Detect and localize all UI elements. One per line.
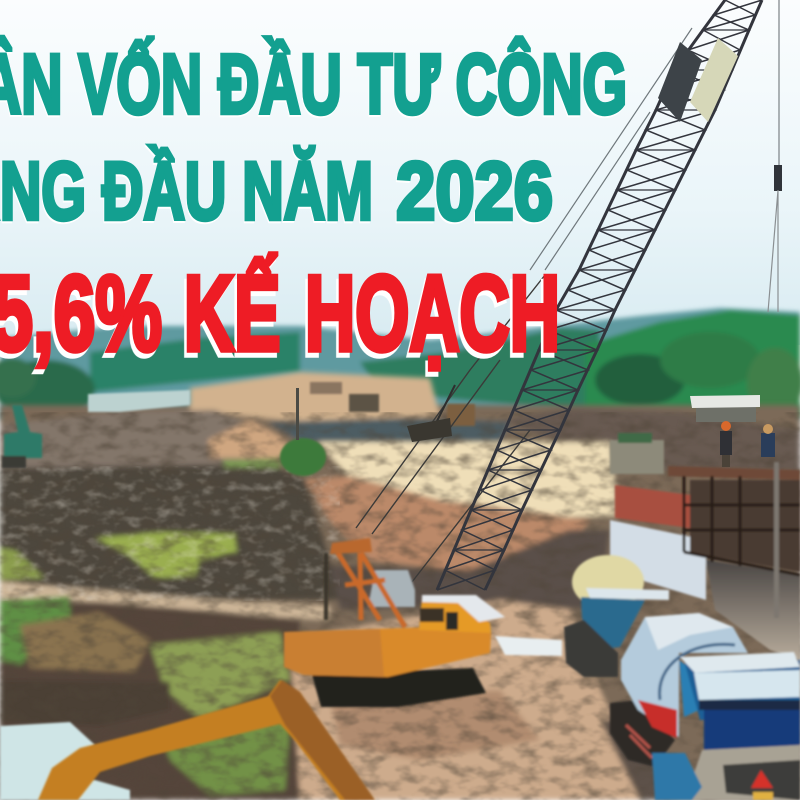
body (284, 627, 491, 677)
pole (296, 388, 299, 440)
wheel arch (652, 753, 702, 800)
panel: crawler crane (284, 538, 505, 707)
a-frame (336, 550, 405, 627)
chassis (610, 700, 675, 767)
sky (0, 0, 800, 345)
icon: workers (720, 421, 775, 467)
icon: small excavator left (2, 405, 42, 468)
tracks (312, 668, 486, 707)
dark field (0, 464, 340, 600)
truck shadow (600, 720, 670, 800)
dirt road foreground (290, 600, 650, 800)
car behind (368, 570, 415, 607)
panel: tanker truck (610, 613, 800, 800)
middle dark right (330, 530, 610, 610)
panel: concrete mixer truck (564, 555, 669, 677)
icon: crane bucket (407, 418, 452, 442)
tank (621, 613, 748, 737)
headline line 2 year: 2026 (396, 146, 553, 237)
cabin (419, 597, 491, 633)
bush (280, 438, 326, 476)
lower left field (0, 600, 300, 800)
right soil pile (500, 408, 800, 472)
upper left soil (0, 410, 285, 468)
sand road (0, 582, 330, 620)
far sand (190, 372, 440, 422)
grille (685, 745, 800, 800)
crane boom banner (658, 38, 738, 122)
crane cables (356, 28, 692, 582)
water and puddles (0, 390, 562, 800)
windshield (704, 710, 800, 750)
crane boom lattice (437, 0, 762, 590)
headline line 3 plan: KẾ HOẠCH (184, 253, 560, 374)
ground (0, 372, 800, 800)
reddish earth (305, 476, 590, 572)
dark slope (268, 418, 510, 442)
icon: hut (690, 395, 760, 422)
warning triangle (751, 770, 773, 788)
ground texture (0, 412, 800, 800)
panel: bridge under construction (610, 433, 800, 660)
green patch (95, 532, 237, 578)
cabin roof (422, 595, 505, 622)
tank red band (638, 700, 677, 738)
cab (679, 660, 699, 717)
icon: hanging hook cable (768, 0, 782, 312)
headline (0, 36, 627, 374)
distant tree line (0, 308, 800, 420)
icon: far machines (310, 382, 475, 426)
light sand (318, 442, 618, 520)
panel: foreground excavator arm (38, 680, 375, 800)
